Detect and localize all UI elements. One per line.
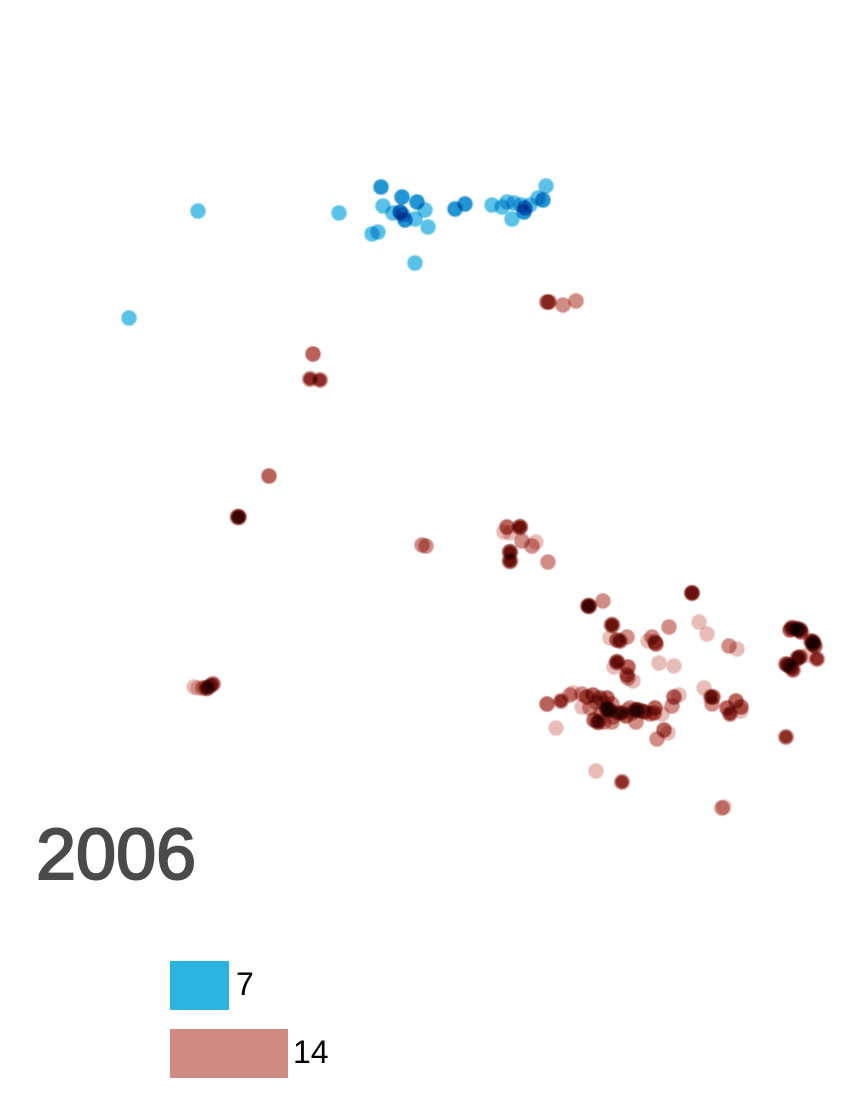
scatter map: red dots (186, 293, 824, 816)
scatter map: blue dots (121, 178, 554, 326)
legend: blue bar: 7 (236, 966, 254, 1002)
year heading: 2006 (36, 815, 196, 895)
legend: red bar: 14 (293, 1034, 329, 1070)
legend: blue bar (170, 961, 254, 1010)
legend: red bar (170, 1029, 329, 1078)
